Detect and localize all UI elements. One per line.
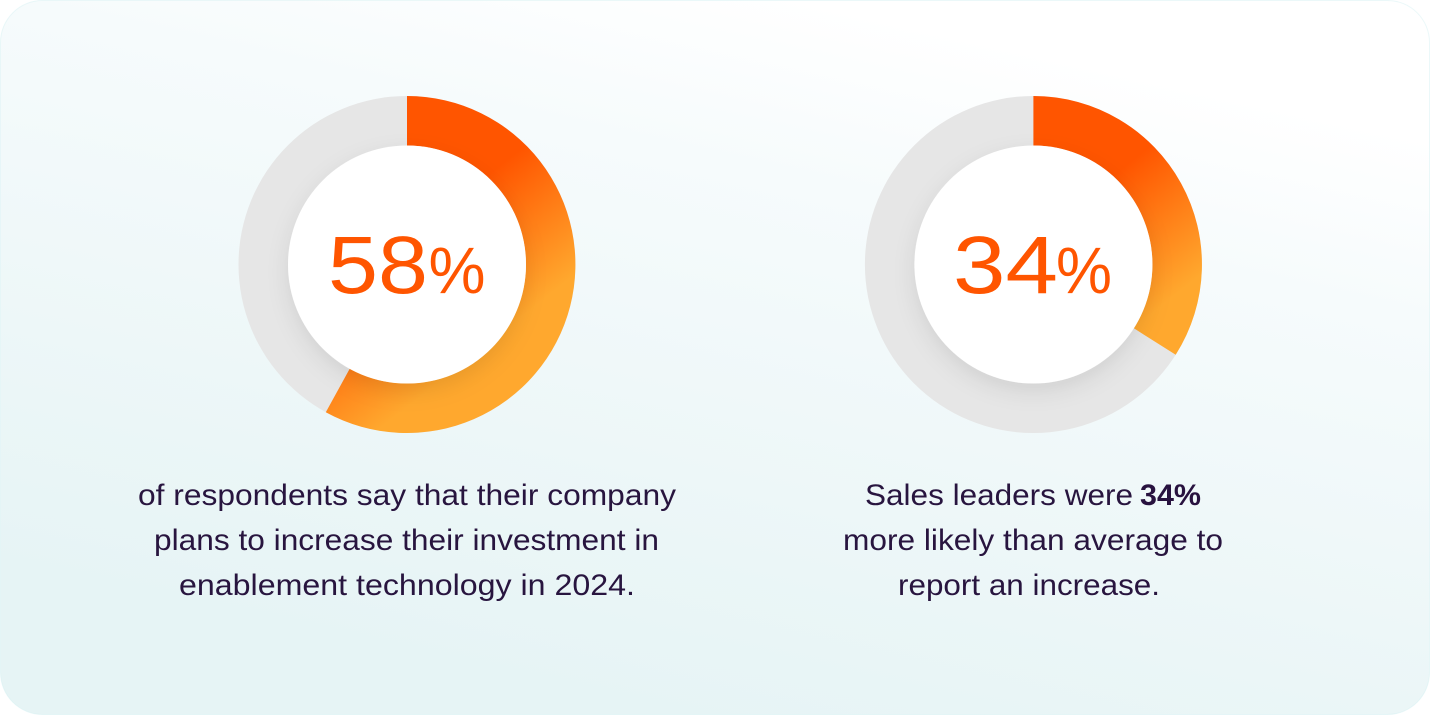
text block: 58% caption xyxy=(138,479,676,602)
text block: 58% caption: of respondents say that their company xyxy=(138,479,676,512)
text block: 34% caption xyxy=(843,479,1223,602)
donut chart: 34% xyxy=(865,96,1202,433)
donut centre circle xyxy=(914,146,1152,384)
value: 34%: 34 xyxy=(953,220,1058,311)
donut chart: 58% xyxy=(238,96,576,433)
donut segment: 58% arc xyxy=(326,96,575,433)
value: 58%: % xyxy=(428,233,486,307)
value: 34%: % xyxy=(1056,233,1112,307)
text block: 34% caption: 34% xyxy=(1140,479,1201,512)
text block: 58% caption: plans to increase their investment in xyxy=(154,524,659,557)
text block: 34% caption: report an increase. xyxy=(898,569,1160,602)
donut segment: 34% arc xyxy=(1033,96,1202,355)
value: 58%: 58 xyxy=(328,220,428,311)
text block: 58% caption: enablement technology in 2024. xyxy=(179,569,635,602)
donut centre circle xyxy=(288,146,526,384)
text block: 34% caption: more likely than average to xyxy=(843,524,1223,557)
text block: 34% caption: Sales leaders were xyxy=(865,479,1133,512)
